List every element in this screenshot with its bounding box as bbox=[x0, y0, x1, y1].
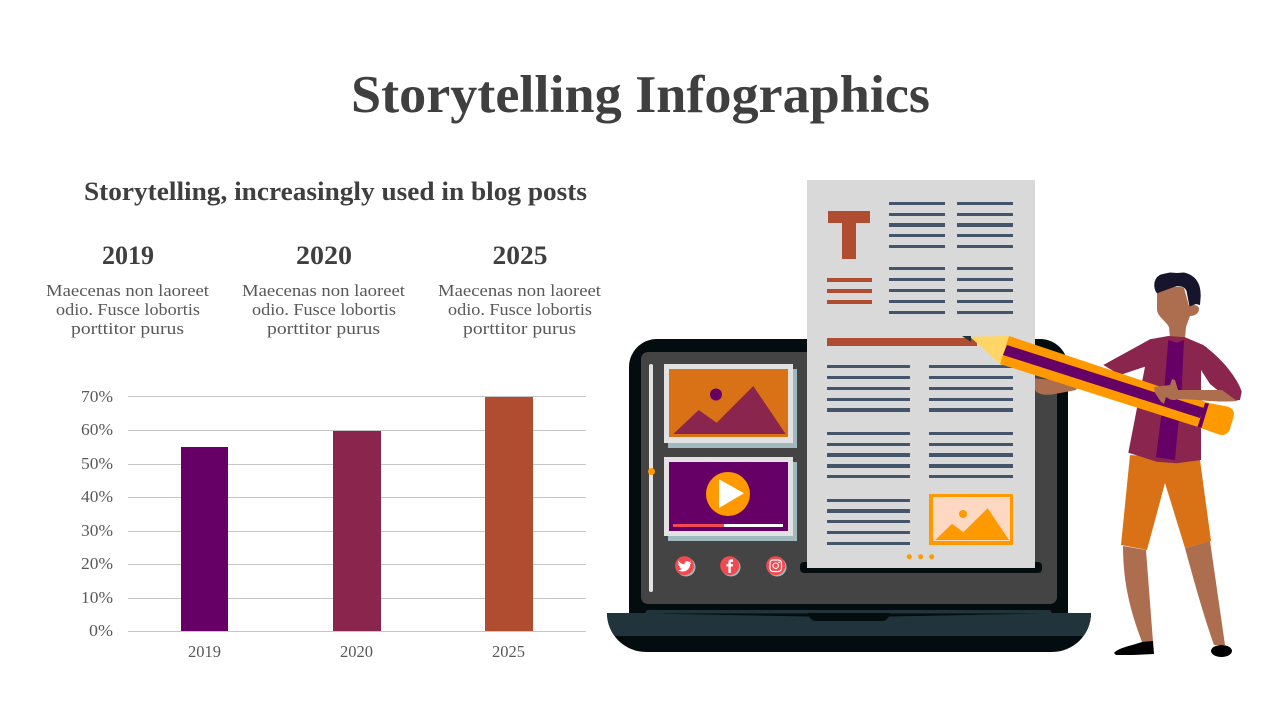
title: Storytelling Infographics bbox=[351, 66, 930, 124]
icon: twitter bbox=[675, 556, 696, 576]
column: 2025: Maecenas non laoreet bbox=[438, 281, 601, 300]
person's far arm bbox=[1030, 378, 1080, 395]
y axis labels: 20% bbox=[81, 554, 113, 573]
video card bbox=[664, 457, 797, 541]
subheading: Storytelling, increasingly used in blog posts bbox=[84, 177, 587, 206]
document image bbox=[929, 494, 1013, 545]
column: 2019: 2019 bbox=[102, 241, 154, 270]
text lines top bbox=[889, 202, 1013, 314]
column: 2025 bbox=[438, 241, 601, 338]
bar: 2020 60% bbox=[333, 431, 381, 631]
bar chart bbox=[81, 387, 586, 661]
pencil bbox=[962, 336, 1234, 435]
y axis labels bbox=[81, 387, 113, 640]
tablet shadow bar bbox=[800, 562, 1042, 573]
letter T bbox=[828, 211, 870, 259]
pagination dots bbox=[907, 554, 934, 559]
column: 2020: Maecenas non laoreet bbox=[242, 281, 405, 300]
y axis labels: 10% bbox=[81, 588, 113, 607]
laptop base bbox=[607, 613, 1091, 652]
shirt bbox=[1156, 340, 1184, 460]
bar: 2019 55% bbox=[181, 447, 228, 631]
column: 2019: Maecenas non laoreet bbox=[46, 281, 209, 300]
column: 2020 bbox=[242, 241, 405, 338]
y axis labels: 50% bbox=[81, 454, 113, 473]
icon: instagram bbox=[766, 556, 786, 576]
person bbox=[962, 272, 1242, 657]
icon: facebook bbox=[720, 556, 740, 576]
x axis labels: 2019 bbox=[188, 642, 221, 661]
x axis labels bbox=[188, 642, 525, 661]
shorts bbox=[1121, 455, 1211, 550]
y axis labels: 0% bbox=[89, 621, 113, 640]
illustration: laptop bbox=[607, 339, 1091, 652]
document page bbox=[807, 180, 1035, 568]
y axis labels: 70% bbox=[81, 387, 113, 406]
legs bbox=[1123, 541, 1225, 645]
slider bbox=[648, 364, 655, 592]
red lines bbox=[827, 278, 872, 304]
image card bbox=[664, 364, 797, 448]
laptop keyboard strip bbox=[645, 610, 1052, 613]
x axis labels: 2025 bbox=[492, 642, 525, 661]
red divider bbox=[827, 338, 977, 346]
column: 2025: 2025 bbox=[492, 241, 548, 270]
y axis labels: 30% bbox=[81, 521, 113, 540]
jacket bbox=[1103, 336, 1242, 463]
bar: 2025 70% bbox=[485, 397, 533, 631]
column: 2019: porttitor purus bbox=[71, 319, 184, 338]
hair bbox=[1154, 272, 1201, 306]
column: 2020: odio. Fusce lobortis bbox=[252, 300, 396, 319]
column: 2025: odio. Fusce lobortis bbox=[448, 300, 592, 319]
y axis labels: 60% bbox=[81, 420, 113, 439]
text lines bottom bbox=[827, 365, 1013, 545]
x axis labels: 2020 bbox=[340, 642, 373, 661]
column: 2019: odio. Fusce lobortis bbox=[56, 300, 200, 319]
column: 2025: porttitor purus bbox=[463, 319, 576, 338]
shoes bbox=[1114, 641, 1232, 657]
column: 2019 bbox=[46, 241, 209, 338]
y axis labels: 40% bbox=[81, 487, 113, 506]
column: 2020: porttitor purus bbox=[267, 319, 380, 338]
neck and head bbox=[1157, 287, 1199, 341]
column: 2020: 2020 bbox=[296, 241, 352, 270]
forearm and hand bbox=[1154, 379, 1237, 404]
